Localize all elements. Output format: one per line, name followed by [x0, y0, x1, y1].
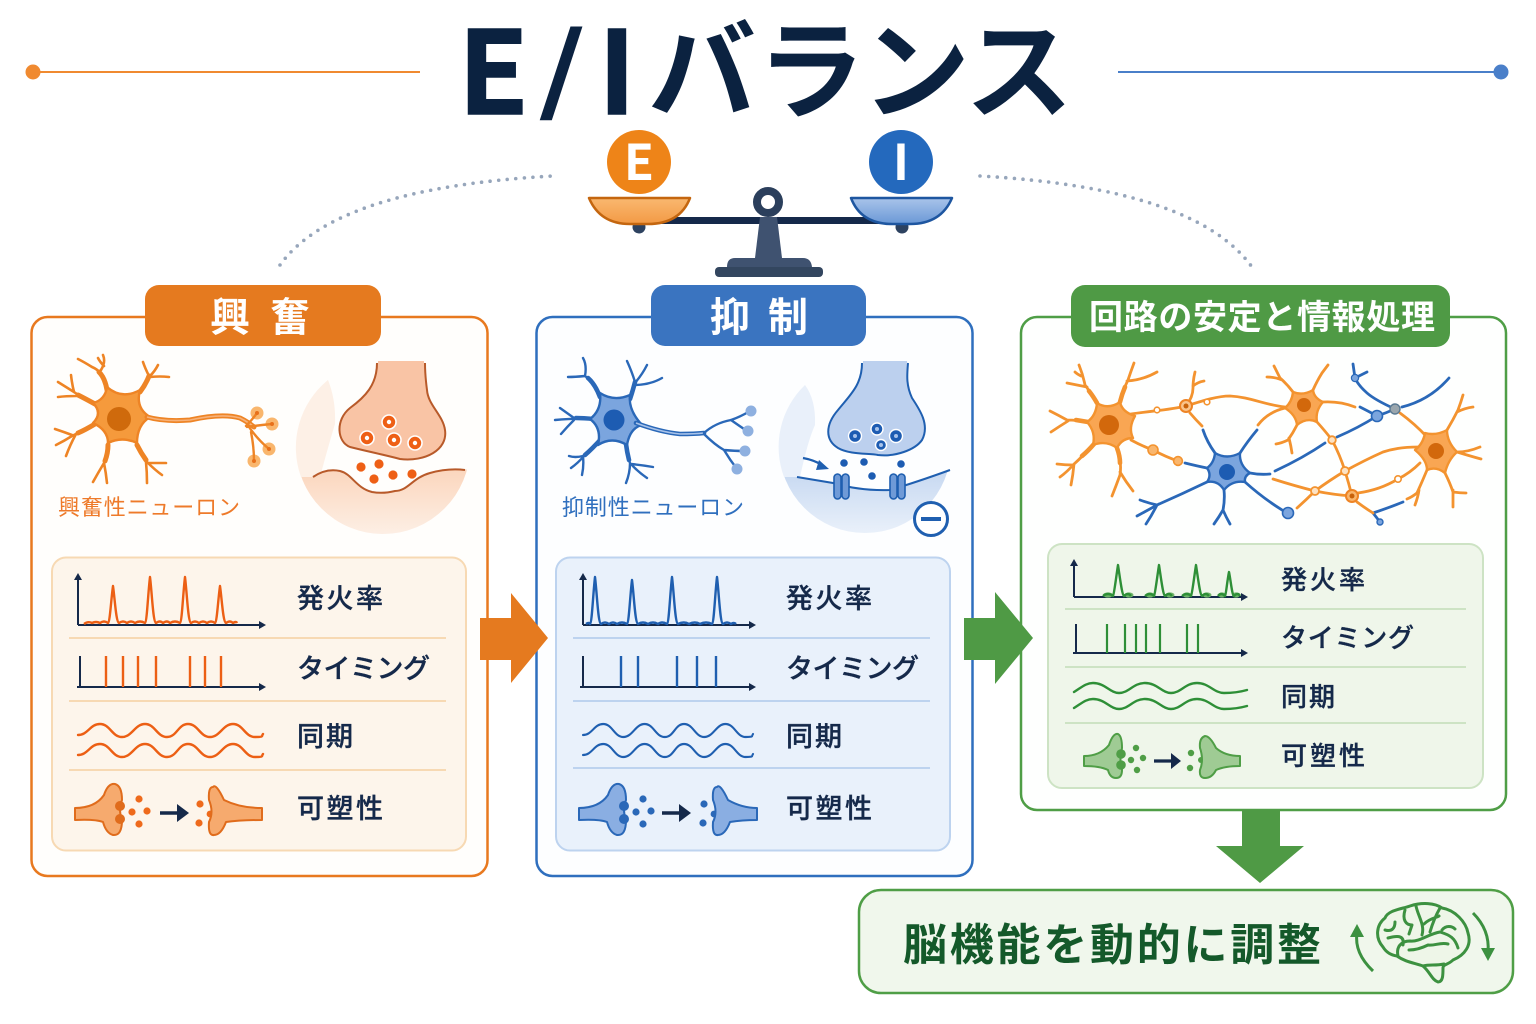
I weight: I: [893, 124, 909, 195]
network of neurons: [1050, 363, 1481, 525]
icon: excitatory synapse: [296, 361, 467, 534]
arrow: inhibition to circuit: [964, 592, 1033, 684]
label: synchrony: 同期: [297, 722, 353, 752]
synaptic nodes: [1148, 374, 1401, 525]
panel: circuit stability and information processing: [1021, 285, 1506, 810]
label: plasticity: 可塑性: [786, 794, 872, 824]
excitatory somata: [1087, 390, 1457, 473]
icon: plasticity: [579, 784, 757, 835]
chart: timing: [77, 656, 266, 691]
title rule right: [1118, 64, 1508, 80]
inhibitory soma: [1207, 453, 1250, 490]
label: firing rate: 発火率: [1281, 565, 1365, 595]
label: plasticity: 可塑性: [297, 794, 383, 824]
dotted arc right: [980, 176, 1252, 267]
label: timing: タイミング: [297, 654, 430, 684]
arrow: excitation to inhibition: [480, 593, 548, 683]
chart: synchrony waves: [583, 724, 753, 757]
icon: inhibitory neuron: [555, 358, 756, 483]
icon: brain: [1378, 904, 1469, 982]
panel: inhibition: [536, 285, 972, 876]
chart: firing rate: [579, 573, 756, 629]
chart: firing rate: [74, 573, 266, 629]
balance scale: [589, 124, 952, 277]
label: inhibitory neuron: 抑制性ニューロン: [562, 495, 744, 520]
chart: timing: [1073, 624, 1248, 657]
heading: excitation: 興 奮: [210, 296, 310, 340]
metrics box: [1048, 544, 1483, 788]
icon: minus badge: [914, 502, 948, 536]
icon: excitatory neuron: [55, 355, 278, 483]
chart: firing rate: [1070, 559, 1248, 601]
icon: plasticity: [75, 784, 262, 835]
text: brain function modulation: 脳機能を動的に調整: [903, 921, 1321, 970]
icon: inhibitory synapse: [778, 361, 950, 537]
heading: circuit stability: [1071, 285, 1450, 347]
chart: synchrony waves: [78, 724, 263, 757]
chart: timing: [580, 656, 756, 691]
E weight: E: [624, 124, 654, 195]
label: timing: タイミング: [786, 654, 919, 684]
E weight: [607, 124, 671, 195]
icon: plasticity: [1084, 734, 1240, 778]
chart: synchrony waves: [1074, 683, 1247, 709]
title rule left: [26, 64, 420, 80]
heading: excitation: [145, 285, 381, 346]
title: [458, 0, 1073, 148]
arrow: circuit to brain function: [1216, 810, 1304, 883]
label: timing: タイミング: [1281, 623, 1414, 653]
metrics box: [52, 558, 466, 850]
label: synchrony: 同期: [1281, 682, 1335, 712]
icon: cycle arrow left: [1350, 924, 1373, 971]
label: synchrony: 同期: [786, 722, 842, 752]
label: excitatory neuron: 興奮性ニューロン: [58, 495, 240, 520]
heading: inhibition: [651, 285, 866, 346]
orange connections: [1050, 363, 1481, 513]
panel: excitation: [32, 285, 488, 876]
dotted arc left: [280, 176, 553, 265]
I weight: [869, 124, 933, 195]
label: plasticity: 可塑性: [1281, 741, 1365, 771]
heading: inhibition: 抑 制: [710, 296, 808, 340]
label: firing rate: 発火率: [786, 584, 872, 614]
metrics box: [556, 558, 950, 850]
icon: cycle arrow right: [1473, 913, 1495, 961]
blue connections: [1137, 364, 1449, 524]
panel: brain function: [859, 890, 1513, 993]
label: firing rate: 発火率: [297, 584, 383, 614]
heading: circuit stability: 回路の安定と情報処理: [1089, 299, 1435, 337]
